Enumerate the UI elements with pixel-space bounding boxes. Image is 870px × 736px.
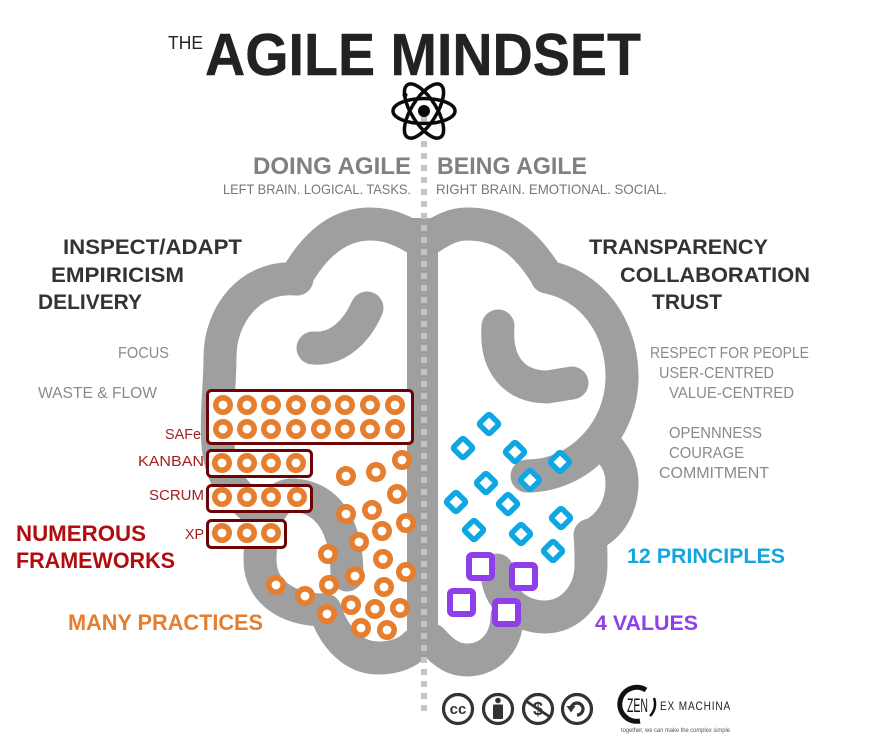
right secondary concepts: RESPECT FOR PEOPLE	[650, 345, 809, 362]
right key concepts	[589, 236, 810, 314]
label: 12 principles: 12 PRINCIPLES	[627, 545, 785, 568]
right secondary concepts: COURAGE	[669, 445, 744, 462]
framework labels: XP	[185, 526, 204, 543]
heading: doing agile: DOING AGILE	[253, 153, 411, 180]
right key concepts: TRANSPARENCY	[589, 236, 768, 259]
icon: atom	[393, 78, 455, 144]
framework practice dots	[215, 398, 402, 540]
label: numerous frameworks: NUMEROUS	[16, 521, 146, 546]
title: AGILE MINDSET	[205, 22, 641, 88]
left key concepts: INSPECT/ADAPT	[63, 236, 242, 259]
central dotted divider	[421, 141, 427, 712]
heading: doing agile	[223, 153, 411, 197]
many practices dots	[269, 453, 413, 637]
right key concepts: COLLABORATION	[620, 264, 810, 287]
left key concepts: EMPIRICISM	[51, 264, 184, 287]
heading: being agile	[436, 153, 667, 197]
framework labels: SCRUM	[149, 487, 204, 504]
left secondary concepts: FOCUS	[118, 345, 169, 362]
label: numerous frameworks: FRAMEWORKS	[16, 548, 175, 573]
logo: zen ex machina: ZEN	[627, 696, 648, 717]
framework labels: KANBAN	[138, 453, 204, 470]
heading: being agile: BEING AGILE	[437, 153, 587, 180]
creative commons icons	[444, 694, 592, 724]
creative commons icons: $	[533, 699, 543, 719]
label: 4 values: 4 VALUES	[595, 612, 698, 635]
brain outline	[217, 218, 622, 660]
left secondary concepts	[38, 345, 169, 402]
heading: doing agile: LEFT BRAIN. LOGICAL. TASKS.	[223, 181, 411, 197]
left key concepts	[38, 236, 242, 314]
4 values squares	[450, 555, 535, 624]
logo: zen ex machina: together, we can make the complex simple	[621, 728, 731, 734]
framework labels	[138, 426, 204, 543]
title: THE	[168, 33, 203, 53]
label: numerous frameworks	[16, 521, 175, 573]
right key concepts: TRUST	[652, 291, 722, 314]
logo: zen ex machina	[620, 687, 731, 734]
left key concepts: DELIVERY	[38, 291, 142, 314]
12 principles diamonds	[446, 414, 571, 561]
creative commons icons: cc	[450, 701, 466, 718]
label: many practices: MANY PRACTICES	[68, 610, 263, 635]
left secondary concepts: WASTE & FLOW	[38, 385, 157, 402]
framework boxes	[208, 390, 412, 548]
logo: zen ex machina: EX MACHINA	[660, 699, 731, 713]
right secondary concepts: OPENNNESS	[669, 425, 762, 442]
right secondary concepts: COMMITMENT	[659, 465, 770, 482]
framework labels: SAFe	[165, 426, 201, 443]
heading: being agile: RIGHT BRAIN. EMOTIONAL. SOCIAL.	[436, 181, 667, 197]
right secondary concepts: USER-CENTRED	[659, 365, 774, 382]
right secondary concepts: VALUE-CENTRED	[669, 385, 794, 402]
right secondary concepts	[650, 345, 809, 482]
